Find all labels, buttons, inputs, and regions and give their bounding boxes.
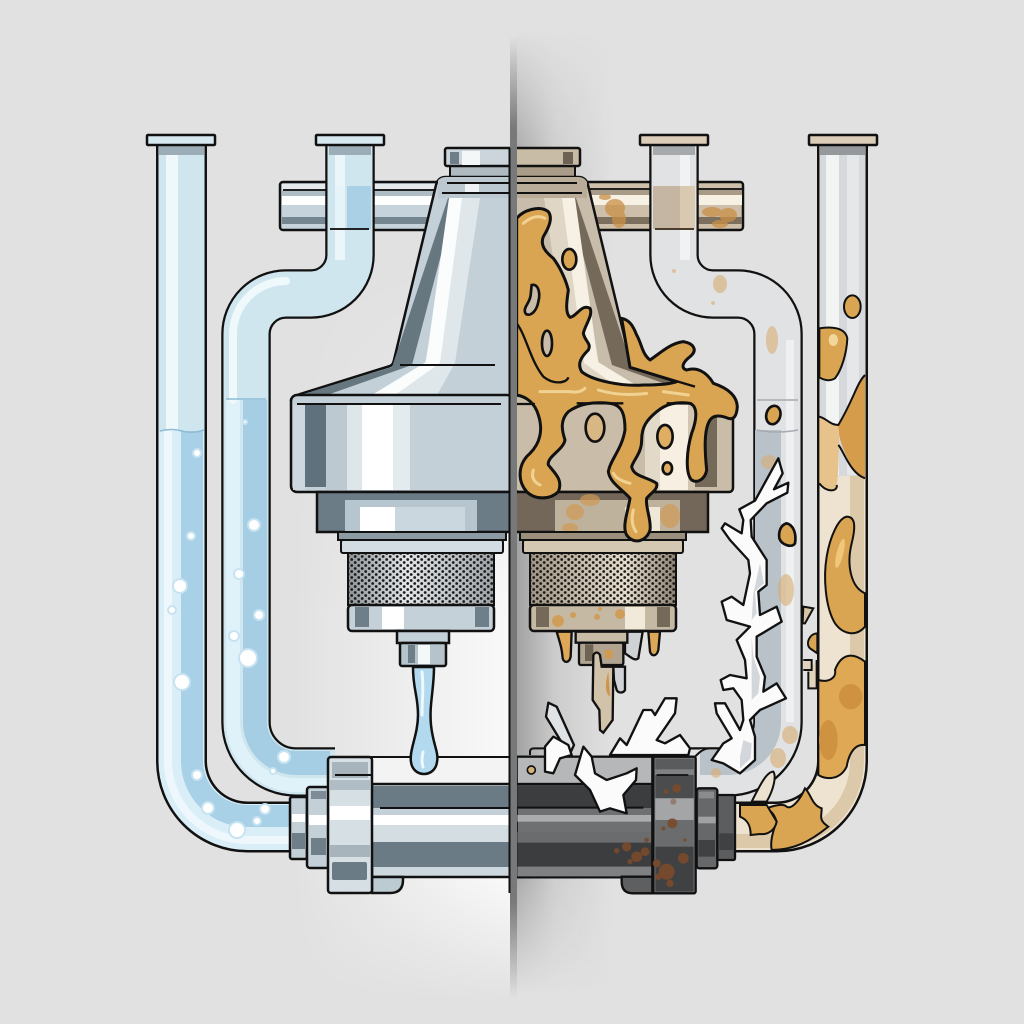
panel: clean side water pipes [147,135,445,840]
illustration: clean versus fouled nozzle and pipe system [146,41,878,992]
pipe: outer right contaminated tube [736,146,865,841]
rust spots [614,784,689,887]
pipe: S-bend grey water tube right [653,146,798,778]
panel: fouled lower dark pipe [517,748,735,893]
rust goo patches lower outer tube [740,517,865,850]
cap: S-bend tube flange left [316,135,384,145]
fouled nozzle cone [517,176,672,384]
fouled nozzle tip and stalactites [557,632,660,733]
bubbles: clean water [168,420,290,838]
crystal chunk left [545,737,572,773]
crystal on dark pipe [575,747,637,813]
main dark pipe [517,784,653,877]
crystals: white scale deposit [545,458,788,813]
goo highlights [523,217,688,532]
back pipe [372,757,510,790]
nozzle mesh filter [348,553,494,605]
rust goo patches upper outer tube [819,295,865,491]
pipe: top horizontal stained pipe right [580,182,743,230]
nozzle cone [291,177,510,400]
panel: clean chrome nozzle [291,148,513,666]
pipe: top horizontal chrome pipe left [280,182,445,230]
pipe: S-bend water tube left [226,146,371,785]
cap: outer left tube flange [147,135,215,145]
dark flange [652,757,696,893]
main horizontal pipe [372,784,512,877]
fouled filter base [530,605,676,631]
flange [328,757,372,893]
fouled nozzle collar [520,532,686,553]
dark outer coupling [697,788,735,868]
goo drops and holes [525,249,795,546]
fouled nozzle lower band [515,492,708,533]
pipe: outer left water tube [159,146,290,840]
rim above pipe [530,748,718,757]
cap: S-bend tube flange right [640,135,708,145]
back pipe dark side [517,757,653,785]
fouled nozzle body [515,395,733,492]
nozzle lower band [317,492,512,532]
divider: centre strip [508,0,517,1024]
crystal branch climbing pipe [712,458,788,773]
nozzle collar [338,532,506,553]
outer coupling [290,787,329,868]
panel: fouled nozzle [515,148,733,733]
crystal shard left [546,703,574,755]
panel: fouled side pipes [580,135,877,850]
goo: thick amber sludge over nozzle [517,209,795,546]
nozzle body [291,395,513,492]
pipe foot [372,877,403,893]
clean water droplet stream [411,667,437,774]
small leaks between tubes [752,607,817,802]
crystal cluster centre [610,698,690,755]
nozzle tip [397,631,449,666]
nozzle cap [445,148,512,178]
fouled nozzle cap [515,148,580,178]
background with centre shadow [388,43,598,982]
cap: outer right tube flange [809,135,877,145]
panel: clean lower chrome pipe [290,757,512,893]
nozzle filter base [348,605,494,631]
fouled mesh filter [530,553,676,605]
pale mark on pipe [527,766,535,774]
dark pipe foot [622,877,653,893]
goo contour lines [517,323,695,404]
